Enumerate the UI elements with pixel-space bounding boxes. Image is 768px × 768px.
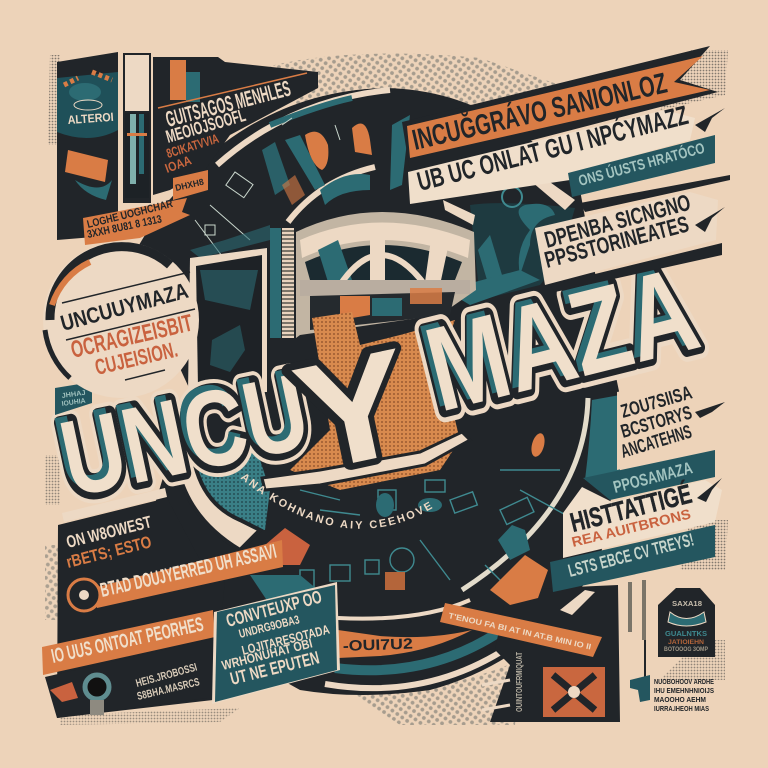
disc lower cream ring	[325, 642, 516, 688]
title lettering UNCUYMAZA: MAZA	[408, 237, 704, 433]
panel subheading: rBETS; ESTO	[64, 532, 153, 572]
cream panel with heading	[535, 189, 718, 285]
teal banner LSTS	[550, 525, 715, 592]
teal ribbon PPOSAMAZA	[583, 450, 715, 500]
orange banner with icon	[68, 540, 283, 611]
teal blob icon	[630, 675, 650, 702]
right upper disc details	[390, 115, 575, 305]
orange centre shape	[290, 312, 460, 490]
bottom caption with icon: HEIS.JROBOSSI	[135, 661, 199, 690]
right small text panel: ANCATEHNS	[618, 422, 694, 463]
right small text panel: BCSTORYS	[619, 402, 695, 443]
arrow icon	[695, 108, 725, 132]
cream panel with heading: DPENBA SICNGNO	[542, 189, 693, 253]
arrow icon	[697, 478, 722, 502]
disc coloured blobs	[250, 432, 547, 605]
panel subheading: MEOIOJSOOFL	[164, 105, 248, 147]
small orange tag: DHXH8	[174, 177, 205, 193]
disc inner ring right	[462, 398, 588, 590]
orange blob	[490, 555, 548, 605]
dark badge: BOTOOOG 3OMP	[664, 647, 708, 653]
dark strip	[550, 243, 722, 292]
teal lower swoosh	[178, 432, 470, 550]
bottom right pipes	[628, 580, 646, 680]
cream diagonal slash	[560, 590, 595, 615]
panel body line: IOAA	[163, 152, 194, 176]
vertical small text: OUINTOUFRMIQUAT	[515, 652, 524, 712]
teal text box: WRHONUHAT OBI	[220, 635, 314, 673]
orange tape banner	[440, 603, 602, 657]
orange banner lower: IO UUS ONTOAT PEORHES	[49, 614, 206, 668]
title lettering UNCUYMAZA: Y	[282, 316, 426, 503]
poster label: ALTEROI	[67, 110, 114, 127]
orange banner lower	[42, 610, 215, 675]
teal text box: LOJITARESOTADA	[240, 621, 332, 658]
title lettering UNCUYMAZA: UNCU	[50, 350, 317, 519]
cream second banner	[408, 99, 695, 204]
bottom right text block: NUOBOHOOV ARDHE	[654, 677, 714, 686]
disc inner cream arc near band	[338, 600, 470, 619]
small orange tag	[173, 170, 208, 200]
bottom caption with icon	[45, 640, 207, 718]
teal text box: UT NE EPUTEN	[228, 647, 321, 689]
teal text box	[212, 582, 340, 704]
central dome building	[296, 212, 476, 338]
narrow strip panel	[123, 53, 151, 203]
orange block	[65, 150, 108, 182]
title lettering UNCUYMAZA: UNCU	[45, 345, 312, 514]
teal sub banner	[568, 135, 715, 197]
bottom right text block: MAOOHO AEHM	[654, 695, 706, 704]
dark badge	[658, 588, 715, 657]
cream panel with heading: PPSSTORINEATES	[542, 211, 692, 273]
teal text box: CONVTEUXP OO	[224, 587, 324, 631]
bottom caption with icon: S8BHA.MASRCS	[136, 676, 201, 703]
left circular badge	[43, 242, 199, 398]
icon: round emblem	[68, 579, 100, 611]
orange left banner	[83, 198, 190, 245]
small teal panel left of title	[55, 382, 92, 415]
small teal panel left of title: IOUHIA	[61, 398, 86, 408]
title lettering UNCUYMAZA: UNCU	[51, 350, 318, 519]
right small text panel: ZOU7SIISA	[619, 382, 695, 423]
central circular disc	[130, 88, 625, 695]
cream panel HISTTATTIGE: HISTTATTIGÉ	[567, 478, 695, 538]
orange tape banner: T'ENOU FA BI AT IN AT.B MIN IO II	[448, 611, 592, 652]
dark badge: SAXA18	[672, 601, 702, 608]
left inner panel	[188, 228, 294, 392]
right small text panel	[617, 370, 725, 470]
cream panel HISTTATTIGE: REA AUITBRONS	[570, 505, 692, 550]
teal banner LSTS: LSTS EBCE CV TREYS!	[566, 529, 696, 581]
small teal panel left of title: JHHAJ	[61, 390, 86, 400]
dark badge: JATIOIEHN	[668, 640, 704, 646]
orange disc band	[338, 630, 472, 658]
arrow icon	[695, 402, 725, 418]
cream strip under title	[62, 488, 167, 522]
top dark text panel	[153, 57, 318, 195]
teal wave	[75, 180, 112, 200]
bottom right text block	[654, 677, 714, 713]
bottom right text block: IHU EMEHNHNIOIJS	[654, 686, 714, 695]
upper disc icons	[190, 118, 372, 260]
teal panel right of ring	[585, 395, 620, 480]
disc caption on arc: ANA KOHNANO AIY CEEHOVE	[240, 474, 432, 529]
dark strip	[580, 175, 730, 212]
title lettering UNCUYMAZA: UNCU	[50, 350, 317, 519]
panel heading: GUITSAGOS MENHLES	[163, 76, 293, 132]
disc lower teal band	[335, 628, 505, 670]
panel heading: ON W8OWEST	[64, 512, 154, 552]
bottom right text block: IURRA.IHEOH MIAS	[654, 704, 709, 713]
arrow marks	[482, 680, 510, 710]
icon: porthole	[50, 675, 109, 715]
teal ribbon PPOSAMAZA: PPOSAMAZA	[611, 458, 694, 497]
top teal arc	[270, 98, 352, 125]
top ring arc	[217, 90, 390, 165]
mosaic artwork	[543, 667, 605, 717]
dark badge: GUALNTKS	[665, 631, 707, 638]
title lettering UNCUYMAZA	[45, 237, 710, 519]
orange left banner: LOGHE UOGHCHAR	[86, 198, 174, 231]
panel body line: 8CIKATVVIA	[164, 131, 221, 161]
bottom-left dark panel	[57, 488, 225, 718]
cream panel HISTTATTIGE	[563, 478, 722, 558]
inner ring arc	[288, 167, 375, 222]
orange disc band: -OUI7U2	[343, 636, 413, 655]
disc line icons	[300, 470, 575, 590]
arrow icon	[695, 207, 725, 232]
badge subtitle line one: OCRAGIZEISBIT	[68, 310, 195, 364]
teal sub banner: ONS ÚUSTS HRATÓCO	[576, 139, 707, 190]
title lettering UNCUYMAZA: Y	[280, 316, 424, 503]
orange banner with icon: BTAD DOUJYERRED UH ASSAVI	[98, 541, 279, 602]
halftone patches	[45, 50, 728, 725]
top-left dark poster panel	[57, 52, 118, 240]
badge subtitle line two: CUJEISION.	[93, 337, 180, 380]
teal text box: UNDRG9OBA3	[237, 612, 301, 641]
orange left banner: 3XXH 8U81 8 1313	[86, 213, 163, 241]
dark lower right panel	[482, 555, 620, 722]
badge title: UNCUUYMAZA	[58, 278, 191, 336]
